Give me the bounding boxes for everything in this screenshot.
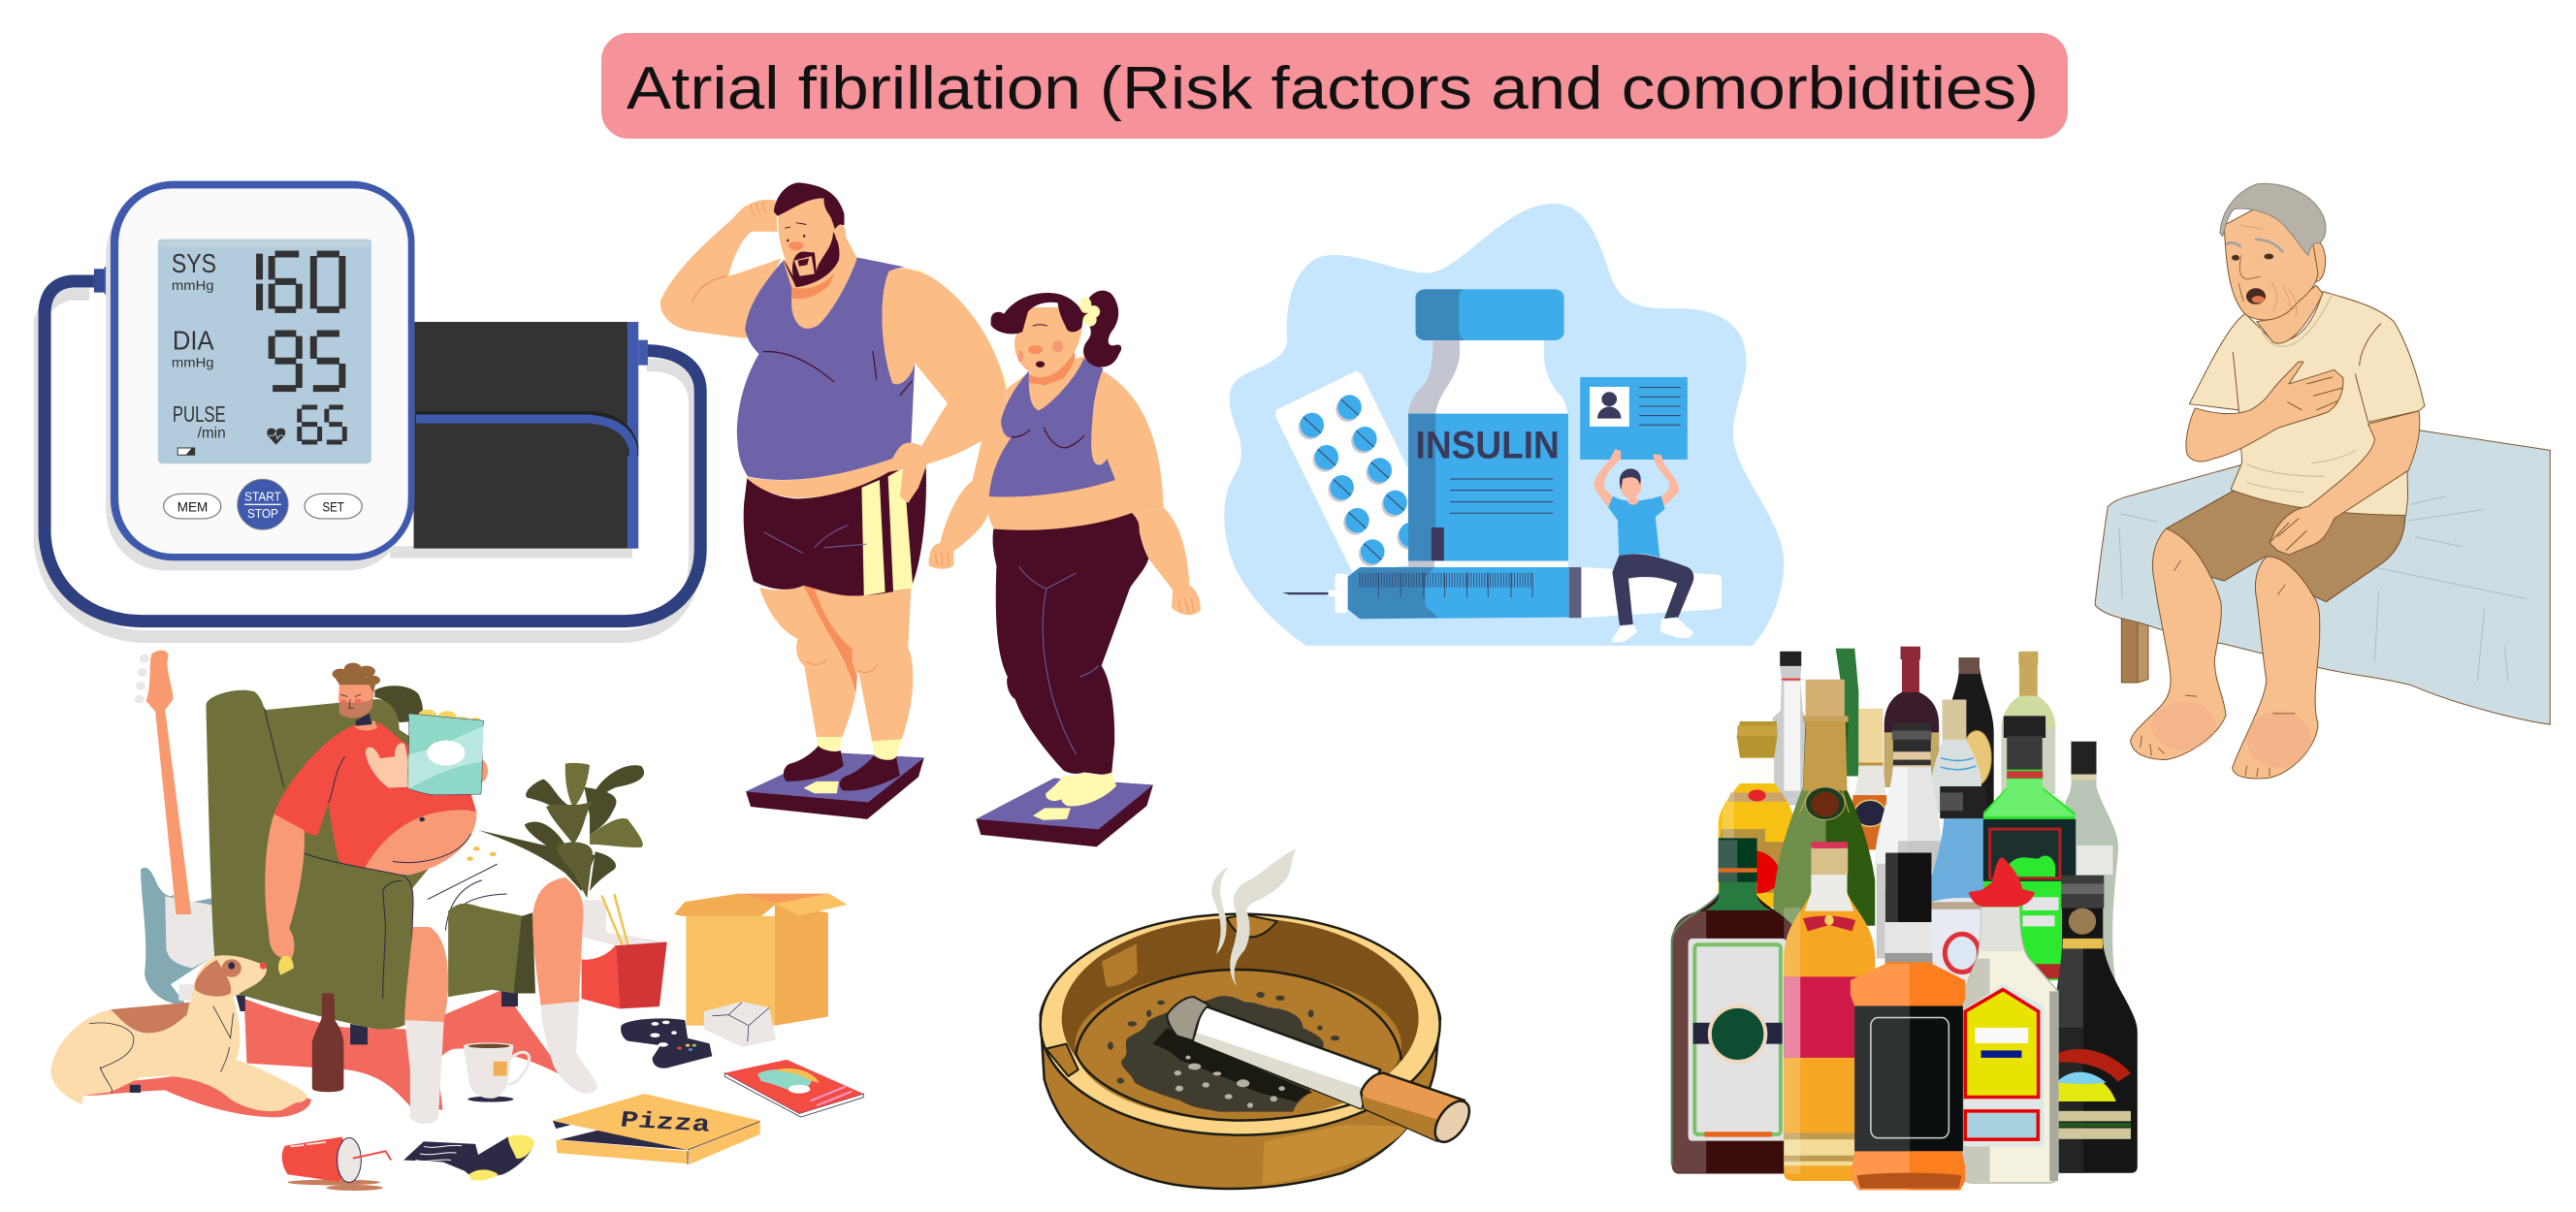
orange liquor bottle [1784, 842, 1875, 1181]
title: Atrial fibrillation (Risk factors and comorbidities) [627, 55, 2039, 122]
id card [1580, 377, 1688, 460]
chip bag [408, 710, 488, 795]
monitor face: mmHg [172, 277, 214, 293]
monitor face: START [244, 491, 281, 504]
game controller [621, 1018, 712, 1068]
blue bottle [1931, 786, 1990, 995]
sock on floor [403, 1135, 534, 1181]
illustration: sedentary man in armchair with mess [50, 651, 863, 1191]
small person holding card [1594, 449, 1693, 643]
illustration: overweight man on scale [660, 182, 1007, 819]
illustration: alcohol bottles [1672, 647, 2138, 1190]
back row bottles [1773, 647, 2118, 995]
takeout box with chopsticks [582, 894, 672, 1008]
illustration: ashtray with lit cigarette [1041, 848, 1476, 1189]
baileys style dark bottle [2055, 876, 2138, 1173]
tall white bottle [1875, 723, 1943, 959]
monitor face: DIA [173, 326, 214, 356]
monitor face: STOP [247, 508, 278, 521]
coffee mug [464, 1042, 530, 1102]
illustration: overweight woman on scale [929, 291, 1201, 846]
magazine [724, 1060, 863, 1117]
legs and swollen feet [2131, 528, 2320, 779]
monitor face: PULSE [173, 401, 226, 427]
illustration: insulin, pills and syringe [1224, 204, 1784, 646]
orange label bottle [1852, 709, 1886, 849]
dog [50, 955, 311, 1117]
cigarette [1167, 997, 1476, 1148]
man in red shirt [265, 663, 476, 978]
ash pile [1108, 992, 1339, 1112]
title [601, 33, 2068, 139]
illustration: blood pressure monitor [40, 181, 700, 637]
beer bottle [312, 993, 343, 1092]
smoke [1211, 848, 1297, 986]
insulin bottle: INSULIN [1416, 425, 1560, 466]
cardboard box [674, 894, 847, 1026]
bed [2095, 431, 2550, 724]
monitor face: /min [198, 425, 226, 442]
armrest [217, 853, 413, 1029]
insulin bottle [1408, 289, 1568, 569]
blister pill pack [1275, 371, 1421, 572]
yellow whisky bottle [1719, 721, 1794, 908]
monitor face: SYS [172, 248, 216, 278]
monitor face: MEM [177, 498, 208, 515]
pizza box [553, 1094, 760, 1164]
green bottle [1983, 716, 2076, 980]
house plant [478, 763, 644, 938]
blue striped small bottle [1931, 699, 1981, 813]
tequila bottle with sombrero cap [1963, 857, 2058, 1183]
monitor face: SET [323, 498, 344, 515]
insulin syringe [1282, 567, 1722, 619]
monitor face: mmHg [172, 354, 214, 370]
spilled cup [282, 1136, 391, 1191]
dark flask bottle with round label [1672, 838, 1793, 1174]
pizza box: Pizza [619, 1108, 712, 1138]
monitor face [118, 188, 408, 554]
jack style whiskey bottle [1851, 852, 1965, 1190]
man's head [2220, 183, 2326, 343]
champagne bottle [1773, 680, 1878, 926]
electric guitar [135, 651, 215, 1005]
illustration: elderly man on bed holding chest [2095, 183, 2550, 779]
